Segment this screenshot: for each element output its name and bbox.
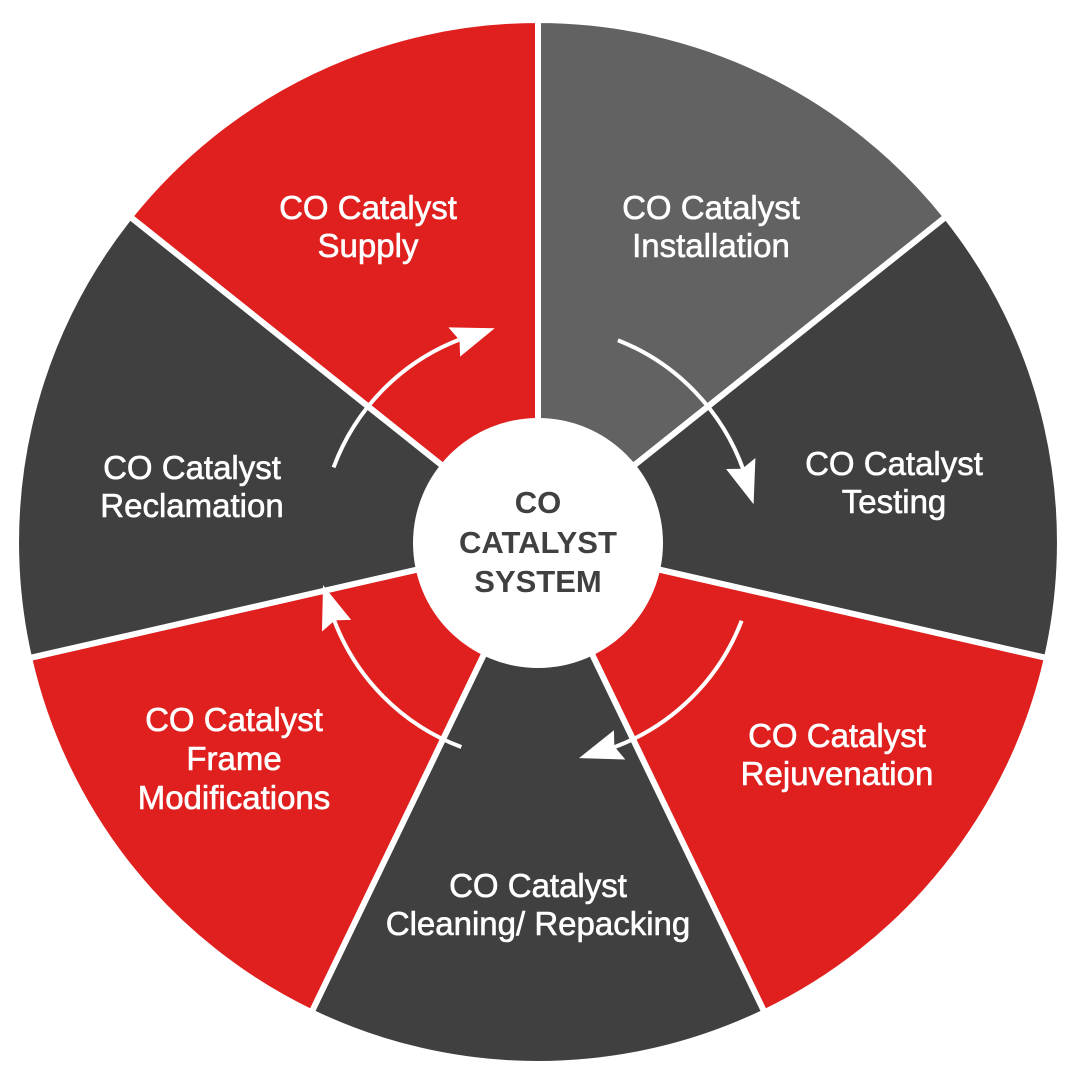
label: reclamation: Reclamation <box>100 487 284 524</box>
label: cleaning: Cleaning/ Repacking <box>386 905 690 942</box>
segment: testing <box>538 217 1060 658</box>
segment: cleaning <box>312 542 764 1064</box>
label: installation: Installation <box>632 227 790 264</box>
center title: CATALYST <box>459 525 617 560</box>
label: rejuvenation: Rejuvenation <box>741 755 933 792</box>
label: supply: Supply <box>318 227 419 264</box>
label: rejuvenation: CO Catalyst <box>748 717 926 754</box>
center title: SYSTEM <box>474 564 602 599</box>
arrow: cleaning to frame <box>312 564 461 771</box>
label: reclamation: CO Catalyst <box>103 449 281 486</box>
labels <box>100 189 983 942</box>
label: supply: CO Catalyst <box>279 189 457 226</box>
segment: reclamation <box>16 217 538 658</box>
center title <box>459 485 617 599</box>
arrow: rejuvenation to cleaning <box>558 621 765 769</box>
label: frame: Frame <box>186 740 282 777</box>
center circle <box>413 418 663 668</box>
segment: rejuvenation <box>538 542 1047 1012</box>
center title: CO <box>515 485 561 520</box>
segment: frame <box>29 542 538 1012</box>
label: frame: CO Catalyst <box>145 701 323 738</box>
arrow: installation to testing <box>618 318 764 524</box>
arrow: reclamation to supply <box>309 318 517 467</box>
segment: supply <box>130 20 538 542</box>
segment: installation <box>538 20 946 542</box>
label: testing: Testing <box>842 483 946 520</box>
label: installation: CO Catalyst <box>622 189 800 226</box>
label: frame: Modifications <box>138 779 330 816</box>
label: testing: CO Catalyst <box>805 445 983 482</box>
label: cleaning: CO Catalyst <box>449 867 627 904</box>
